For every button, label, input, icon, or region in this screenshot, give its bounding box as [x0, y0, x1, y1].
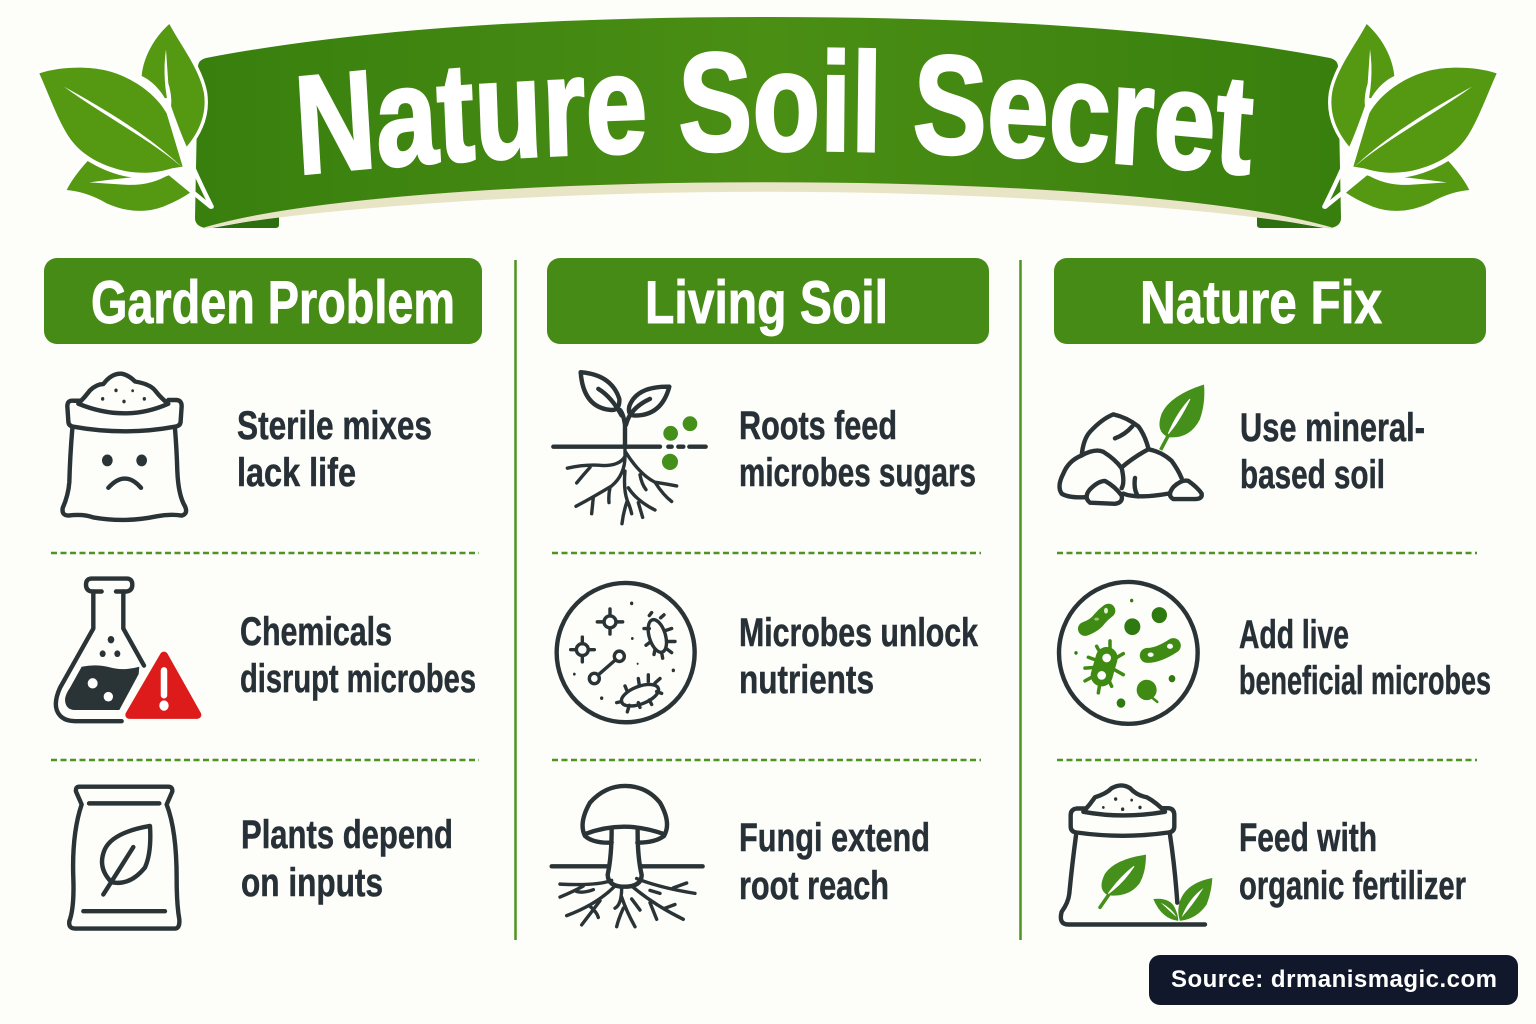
- icon: organic fertilizer sack: [1061, 785, 1212, 924]
- text: Chemicals disrupt microbes: disrupt microbes: [240, 657, 476, 701]
- text: Fungi extend root reach: root reach: [739, 864, 889, 908]
- icon: fertilizer bag: [69, 787, 179, 929]
- text: Roots feed microbes sugars: microbes sugars: [739, 451, 976, 495]
- text: Add live beneficial microbes: Add live: [1239, 613, 1349, 657]
- text: Sterile mixes lack life: [237, 404, 432, 495]
- heading: Nature Fix: [1054, 258, 1486, 344]
- heading: Garden Problem: Garden Problem: [91, 269, 455, 336]
- text: Sterile mixes lack life: Sterile mixes: [237, 404, 432, 448]
- icon: sad sack: [63, 374, 186, 520]
- panel: Garden Problem: [44, 258, 482, 929]
- icon: beneficial microbes in dish: [1059, 582, 1198, 724]
- text: Use mineral-based soil: based soil: [1240, 453, 1385, 497]
- icon: right leaves: [1324, 24, 1497, 211]
- text: Chemicals disrupt microbes: Chemicals: [240, 610, 392, 654]
- text: Fungi extend root reach: Fungi extend: [739, 816, 930, 860]
- text: Roots feed microbes sugars: Roots feed: [739, 404, 897, 448]
- heading: Nature Fix: Nature Fix: [1140, 269, 1382, 336]
- text: Microbes unlock nutrients: [739, 611, 979, 702]
- text: Roots feed microbes sugars: [739, 404, 976, 495]
- text: Use mineral-based soil: [1240, 406, 1425, 497]
- source badge: [1149, 955, 1518, 1005]
- text: Microbes unlock nutrients: nutrients: [739, 658, 874, 702]
- title banner: [195, 17, 1341, 228]
- text: Add live beneficial microbes: [1239, 613, 1491, 703]
- heading: Garden Problem: [44, 258, 482, 344]
- icon: left leaves: [39, 24, 212, 211]
- panel: Living Soil: [547, 258, 989, 927]
- text: Plants depend on inputs: [241, 813, 453, 905]
- icon: rocks with leaf: [1060, 385, 1204, 504]
- panel: Nature Fix: [1054, 258, 1491, 924]
- icon: flask with warning: [56, 579, 197, 721]
- heading: Living Soil: Living Soil: [645, 269, 888, 336]
- icon: plant roots: [553, 372, 706, 524]
- heading: Living Soil: [547, 258, 989, 344]
- title: Nature Soil Secret: [298, 47, 1254, 176]
- text: Plants depend on inputs: Plants depend: [241, 813, 453, 857]
- text: Fungi extend root reach: [739, 816, 930, 908]
- text: Microbes unlock nutrients: Microbes unlock: [739, 611, 979, 655]
- text: Use mineral-based soil: Use mineral-: [1240, 406, 1425, 450]
- text: Feed with organic fertilizer: Feed with: [1239, 816, 1377, 860]
- text: Sterile mixes lack life: lack life: [237, 451, 356, 495]
- icon: microbes in petri dish: [557, 583, 695, 722]
- icon: mushroom with mycelium: [552, 786, 703, 927]
- text: Chemicals disrupt microbes: [240, 610, 476, 701]
- source badge: Source: drmanismagic.com: [1171, 966, 1497, 993]
- text: Feed with organic fertilizer: [1239, 816, 1466, 908]
- text: Plants depend on inputs: on inputs: [241, 861, 383, 905]
